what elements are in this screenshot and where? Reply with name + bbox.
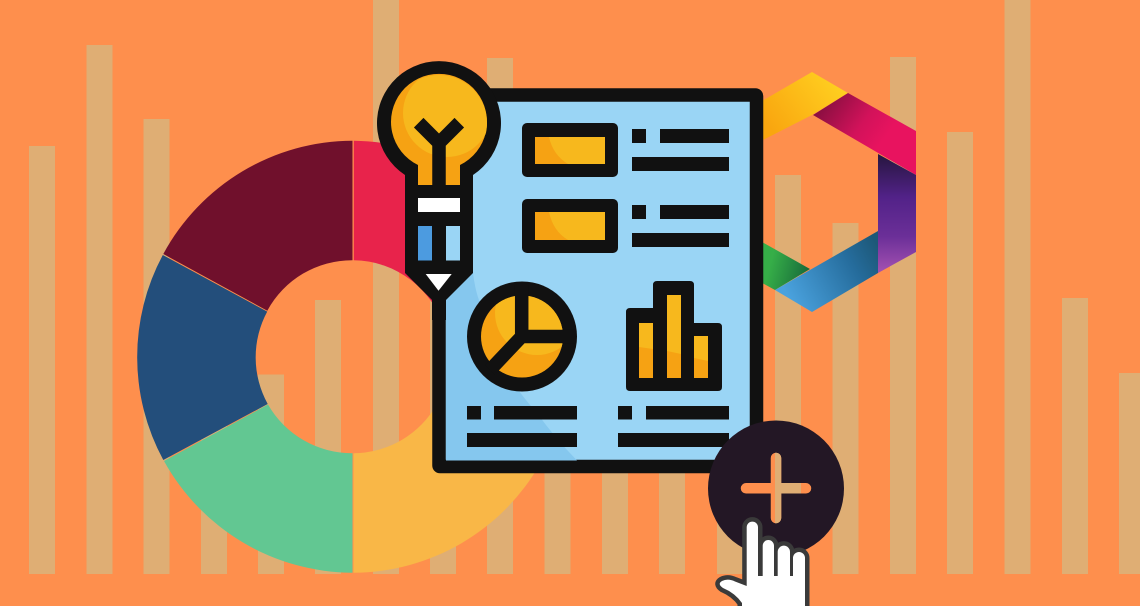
pencil tip <box>426 274 452 291</box>
plus sign <box>746 458 806 518</box>
pencil blue stripe left <box>418 226 432 260</box>
bottom right text lines <box>618 406 729 447</box>
icon: pointing hand cursor <box>720 522 805 606</box>
donut segment: navy <box>137 255 268 460</box>
donut chart <box>137 141 560 573</box>
bulb glass <box>391 69 491 185</box>
list item one: box <box>522 123 618 177</box>
bulb filament <box>419 123 459 190</box>
document panel <box>439 95 756 466</box>
hexagon: crimson band <box>813 93 916 175</box>
icon: light bulb pencil <box>377 61 501 320</box>
list item two: text lines <box>632 205 729 247</box>
plus button <box>708 420 844 556</box>
button circle <box>708 420 844 556</box>
donut segment: red <box>354 141 560 330</box>
icon: pie chart <box>467 282 577 392</box>
bulb pencil outline <box>377 61 501 320</box>
donut segment: yellow <box>354 404 540 573</box>
document sheet <box>439 95 756 466</box>
donut segment: maroon <box>163 141 352 311</box>
bottom left text lines <box>467 406 577 447</box>
pencil blue stripe right <box>446 226 460 260</box>
pencil white band <box>418 198 460 212</box>
document shading <box>446 262 577 460</box>
hexagon: blue band <box>775 231 878 312</box>
list item one: text lines <box>632 129 729 171</box>
hexagon: purple band <box>878 154 916 273</box>
hexagon: green band <box>755 238 810 290</box>
icon: bar chart <box>626 281 722 391</box>
donut segment: green <box>164 404 352 573</box>
hexagon: yellow band <box>755 72 848 144</box>
list item two: box <box>522 199 618 253</box>
hexagon logo <box>755 72 916 312</box>
